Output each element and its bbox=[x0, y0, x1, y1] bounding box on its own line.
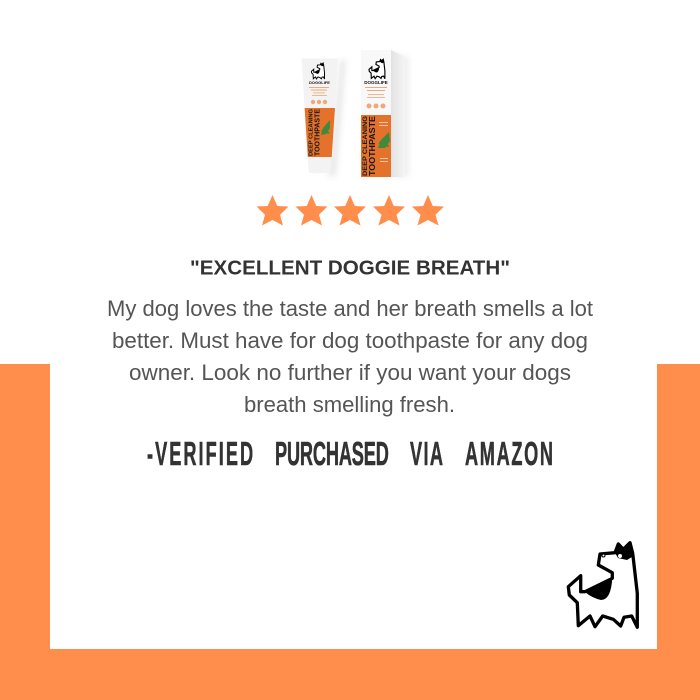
tube bbox=[302, 58, 338, 173]
box logo bbox=[369, 59, 385, 79]
box small label lines bbox=[365, 87, 387, 108]
box leaf bbox=[378, 132, 390, 148]
box: TOOTHPASTE bbox=[368, 115, 377, 176]
attribution: verified purchased via amazon: AMAZON bbox=[465, 435, 553, 472]
dog ear patch bbox=[615, 543, 634, 560]
tube: DOGGLIFE bbox=[309, 80, 330, 85]
review body text: My dog loves the taste and her breath smells a lot bbox=[107, 296, 593, 321]
box: DOGGLIFE bbox=[364, 80, 388, 85]
tube small label lines bbox=[309, 87, 329, 104]
attribution: verified purchased via amazon: VIA bbox=[410, 435, 443, 472]
box heading text: DEEP CLEANING bbox=[362, 116, 369, 176]
attribution: verified purchased via amazon bbox=[147, 435, 553, 472]
product shadow bbox=[328, 52, 409, 178]
tube heading text: DEEP CLEANING bbox=[308, 109, 314, 156]
review body text: better. Must have for dog toothpaste for any dog bbox=[112, 328, 588, 353]
dog eyes bbox=[602, 554, 605, 557]
tube: TOOTHPASTE bbox=[314, 109, 322, 156]
tube leaf bbox=[321, 120, 330, 135]
review body text bbox=[107, 296, 593, 417]
product: toothpaste tube and box bbox=[302, 50, 409, 178]
five star rating bbox=[256, 195, 444, 226]
attribution: verified purchased via amazon: -VERIFIED bbox=[147, 435, 253, 472]
review heading: "EXCELLENT DOGGIE BREATH" bbox=[190, 258, 510, 280]
tube logo bbox=[311, 63, 325, 79]
icon: dog logo bbox=[568, 543, 637, 627]
box bbox=[361, 50, 405, 177]
attribution: verified purchased via amazon: PURCHASED bbox=[275, 435, 389, 472]
orange background frame bbox=[0, 364, 700, 700]
review body text: owner. Look no further if you want your dogs bbox=[129, 360, 571, 385]
review body text: breath smelling fresh. bbox=[244, 392, 455, 417]
dog back patch bbox=[585, 578, 612, 600]
